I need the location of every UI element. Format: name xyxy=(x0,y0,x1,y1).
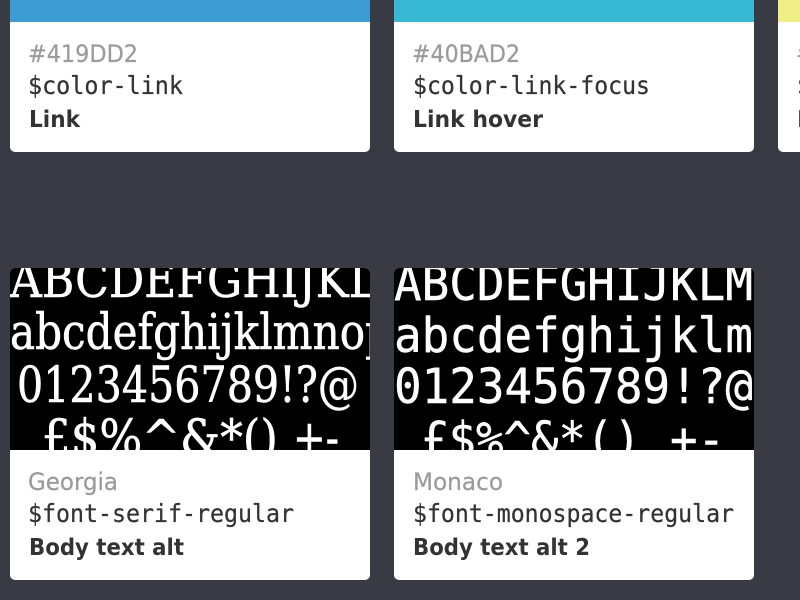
panel: link hover color card xyxy=(394,0,754,152)
hex value: link: #419DD2 xyxy=(28,40,138,68)
font specimen: Monaco: +- xyxy=(670,412,725,468)
usage label: body text alt: Body text alt xyxy=(29,533,184,561)
font specimen: Georgia: abcdefghijklmnop xyxy=(10,303,392,361)
font specimen: Georgia xyxy=(10,268,370,450)
panel: Georgia font card xyxy=(10,268,370,580)
usage label: link hover: Link hover xyxy=(413,105,543,133)
font specimen: Monaco xyxy=(394,268,754,450)
font specimen: Monaco: abcdefghijklm xyxy=(394,308,753,364)
variable name: serif: $font-serif-regular xyxy=(28,499,294,528)
font specimen: Monaco: ABCDEFGHIJKLM xyxy=(394,256,753,312)
color swatch: link blue xyxy=(10,0,370,22)
variable name: monospace: $font-monospace-regular xyxy=(413,499,734,528)
panel: Monaco font card xyxy=(394,256,754,580)
font name: Georgia: Georgia xyxy=(28,468,118,496)
panel: partially visible yellow color card xyxy=(778,0,800,152)
hex value: link hover: #40BAD2 xyxy=(412,40,520,68)
color swatch: yellow xyxy=(778,0,800,22)
font specimen: Georgia: £$%^&*() xyxy=(42,409,278,467)
variable name: link hover: $color-link-focus xyxy=(413,71,650,100)
font specimen: Monaco: 0123456789!?@ xyxy=(394,359,753,415)
usage label: body text alt 2: Body text alt 2 xyxy=(413,533,590,561)
color swatch: link hover cyan xyxy=(394,0,754,22)
variable name: link: $color-link xyxy=(28,71,183,100)
font specimen: Georgia: +- xyxy=(293,409,339,467)
panel: link color card xyxy=(10,0,370,152)
usage label: link: Link xyxy=(29,105,81,133)
font specimen: Monaco: £$%^&*() xyxy=(421,412,641,468)
font specimen: Georgia: 0123456789!?@ xyxy=(17,356,359,414)
font name: Monaco: Monaco xyxy=(413,468,503,496)
font specimen: Georgia: ABCDEFGHIJKL xyxy=(9,251,378,309)
